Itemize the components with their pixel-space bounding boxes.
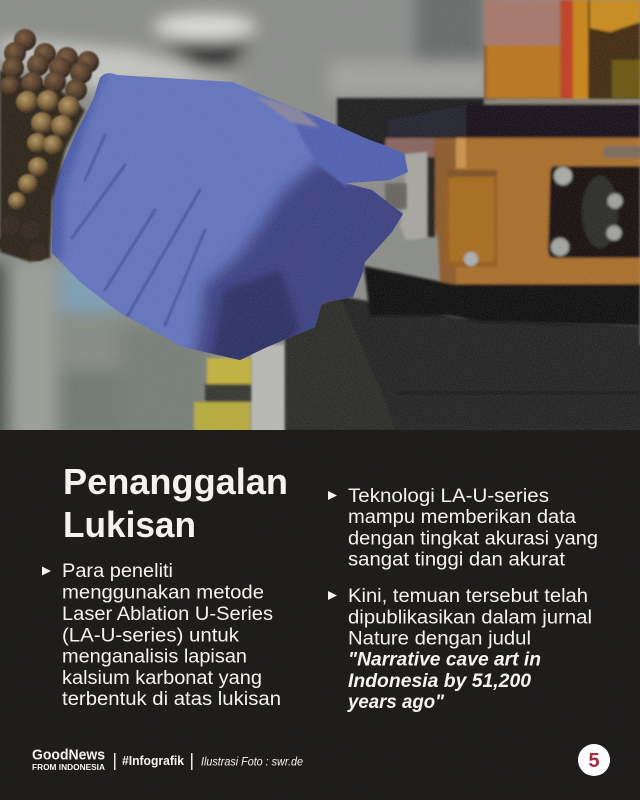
bullet text: menganalisis lapisan [62,647,247,668]
bullet text: mampu memberikan data [348,507,576,528]
recessed window [445,170,497,267]
icon: bullet arrow [328,491,337,500]
text: left bullet [42,561,281,710]
text: title: Lukisan [63,504,196,545]
bullet text: Kini, temuan tersebut telah [348,586,588,607]
page number badge: 5 [588,750,600,772]
icon: bullet arrow [328,591,337,600]
bullet text: dipublikasikan dalam jurnal [348,607,592,628]
bullet text: terbentuk di atas lukisan [62,689,281,710]
footer: photo credit: Ilustrasi Foto : swr.de [201,757,303,769]
beaded bracelets [0,29,99,262]
hand in blue glove [52,73,408,360]
bullet text [62,561,281,710]
page number badge [578,744,610,776]
text: title [63,461,288,545]
amber beaker [484,0,640,100]
instrument body [364,99,640,326]
base [364,266,640,326]
bullet text: menggunakan metode [62,583,264,604]
footer: brand logo: GoodNews [32,746,105,764]
bullet text: Teknologi LA-U-series [348,486,549,507]
bullet text [348,486,598,571]
dark table surface [285,296,640,435]
footer: hashtag: #Infografik [122,754,184,768]
bullet text: dengan tingkat akurasi yang [348,529,598,550]
glove folds [72,135,205,325]
bullet text: years ago" [347,692,445,713]
photo grain overlay [0,0,640,430]
dark shelf behind instrument [337,98,497,146]
black connector plate [548,166,640,258]
text: right bullet one [328,486,598,571]
white column [251,345,285,435]
footer: brand logo [32,746,105,772]
glove fingers [296,112,408,187]
orange housing [454,136,640,287]
dark beads mass [0,70,85,262]
panel: photo of gloved hand at laser ablation instrument [0,0,640,452]
instrument lid [386,104,640,138]
glove shadow area [195,160,420,365]
icon: bullet arrow [42,566,51,576]
footer: brand logo: FROM INDONESIA [32,763,105,772]
bullet text: Laser Ablation U-Series [62,604,273,625]
text: title: Penanggalan [63,461,288,502]
yellow stripes in background [194,358,251,432]
dark panel grain [0,430,640,800]
bullet text: Indonesia by 51,200 [348,671,531,692]
text: right bullet two [328,586,592,713]
photo background [0,0,640,452]
bullet text: Nature dengan judul [348,629,531,650]
bullet text: "Narrative cave art in [348,650,541,671]
bullet text: sangat tinggi dan akurat [348,550,566,571]
bullet text: Para peneliti [62,561,173,582]
bullet text: (LA-U-series) untuk [62,626,240,646]
bullet text [347,586,592,713]
metal knob [400,152,427,240]
bullet text: kalsium karbonat yang [62,668,262,689]
